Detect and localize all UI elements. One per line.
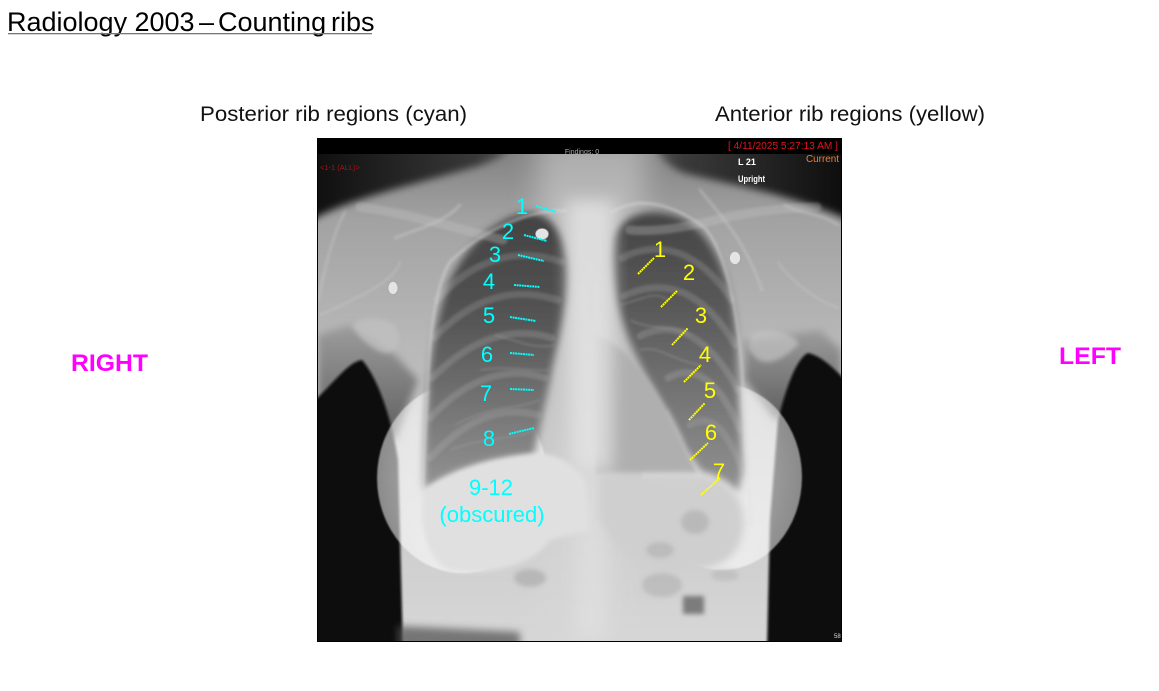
image annotations: L 21 (738, 157, 756, 167)
image annotations: Current (806, 154, 839, 165)
posterior rib markers (cyan) (439, 194, 556, 527)
image annotations: Findings: 0 (565, 149, 599, 156)
image annotations (320, 141, 841, 640)
image annotations: 58 (834, 634, 841, 640)
label: right side: RIGHT (71, 350, 148, 377)
title: Radiology (7, 7, 128, 37)
posterior rib markers (cyan): 6 (481, 342, 493, 367)
top black band (318, 139, 841, 154)
bottom fade (394, 621, 526, 641)
torso and shoulders silhouette (318, 154, 841, 641)
rib cage outer edge (423, 202, 744, 484)
anterior rib markers (yellow): 3 (695, 303, 707, 328)
left dark arm gap (310, 360, 403, 650)
heart shadow (596, 335, 698, 474)
title: ribs (331, 7, 375, 37)
shoulder soft tissue folds (352, 319, 798, 362)
clavicles and shoulder bones (324, 188, 839, 290)
label: left side: LEFT (1059, 343, 1121, 370)
title (7, 7, 375, 37)
title: Counting (218, 7, 326, 37)
central mediastinum (566, 200, 614, 470)
patient right breast (377, 383, 547, 573)
chest x-ray image (300, 135, 860, 660)
lung: patient left (613, 212, 743, 492)
anterior rib markers (yellow): 7 (713, 459, 725, 484)
patient right liver dome (422, 454, 590, 572)
anterior rib markers (yellow): 2 (683, 260, 695, 285)
posterior rib markers (cyan): 3 (489, 242, 501, 267)
image annotations: [ 4/11/2025 5:27:13 AM ] (728, 141, 838, 152)
image annotations: Upright (738, 174, 765, 184)
image annotations: <1-1 (ALL)> (320, 163, 361, 172)
lung: patient right (424, 213, 568, 490)
heading: anterior rib regions: Anterior rib regions (yellow) (715, 103, 985, 126)
posterior rib markers (cyan): 8 (483, 426, 495, 451)
title: – (199, 7, 214, 37)
posterior rib markers (cyan): 5 (483, 303, 495, 328)
posterior rib markers (cyan): 4 (483, 269, 495, 294)
right dark arm gap (767, 353, 848, 650)
posterior rib markers (cyan): 1 (516, 194, 528, 219)
posterior rib markers (cyan): 9-12 (469, 475, 513, 500)
area above shoulders (318, 154, 841, 216)
patient left breast (668, 386, 803, 570)
bowel gas (514, 510, 739, 614)
ribs (430, 249, 742, 470)
anterior rib markers (yellow): 6 (705, 420, 717, 445)
anterior rib markers (yellow): 1 (654, 237, 666, 262)
heading: posterior rib regions: Posterior rib regions (cyan) (200, 103, 467, 126)
lung vessel markings (481, 294, 698, 406)
neck and spine column (526, 154, 662, 457)
posterior rib markers (cyan): (obscured) (439, 502, 545, 527)
posterior rib markers (cyan): 7 (480, 381, 492, 406)
anterior rib markers (yellow): 4 (699, 342, 711, 367)
posterior rib markers (cyan): 2 (502, 219, 514, 244)
spine below diaphragm (586, 480, 597, 558)
anterior rib markers (yellow): 5 (704, 378, 716, 403)
anterior rib markers (yellow) (638, 237, 725, 495)
title: 2003 (134, 7, 195, 37)
arm shadow patches (318, 325, 841, 440)
markers on skin (388, 228, 740, 294)
stomach and diaphragm (619, 471, 745, 568)
